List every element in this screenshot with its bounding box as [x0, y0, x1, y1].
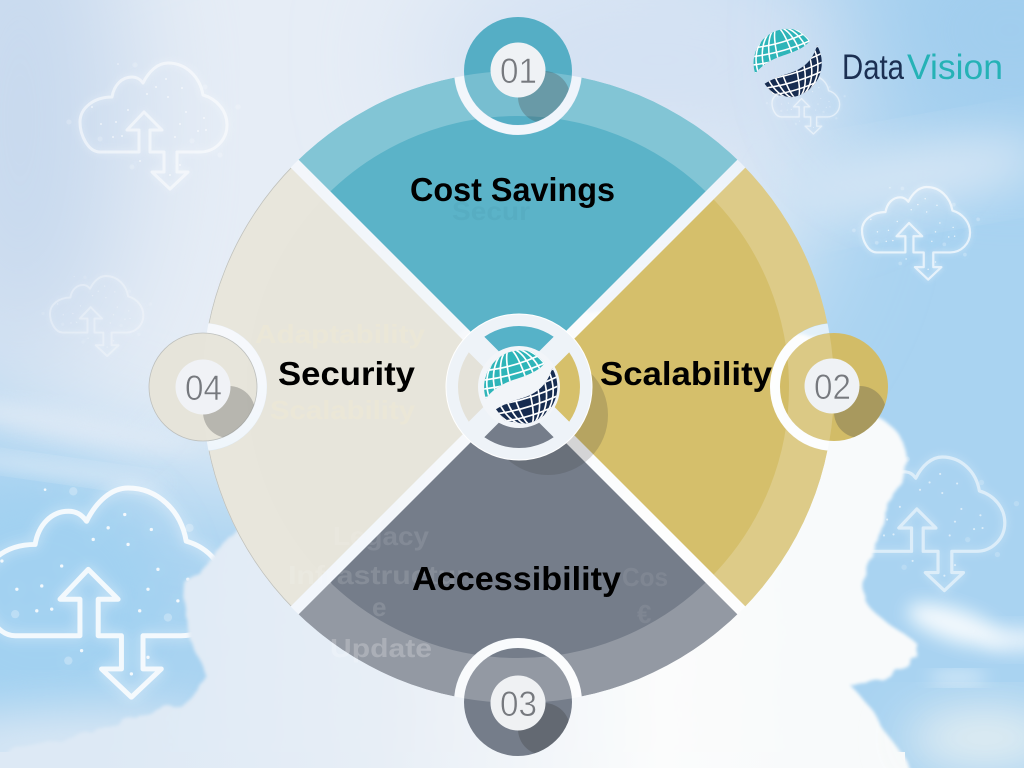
- logo wordmark: Vision: [907, 48, 1003, 87]
- background icon: cloud right: [835, 456, 1019, 591]
- background icon: large cloud bottom left: [0, 487, 248, 697]
- rings around number badges: [207, 76, 830, 698]
- faint ghost text: Infrastructur: [288, 560, 468, 590]
- hub drop shadow: [488, 355, 608, 475]
- center hub: [446, 314, 592, 460]
- background icon: cloud mid left: [41, 276, 152, 356]
- badge: 04: 04: [185, 369, 222, 408]
- faint ghost text: [255, 196, 668, 663]
- background icon: cloud top left: [66, 62, 240, 189]
- icon: logo globe: [740, 17, 834, 109]
- icon: globe in hub: [470, 338, 570, 436]
- faint ghost text: Scalability: [270, 395, 416, 425]
- badge: 01: 01: [500, 52, 537, 91]
- faint ghost text: €: [637, 599, 651, 629]
- pale gaps between sectors: [291, 160, 745, 614]
- faint ghost text: e: [372, 592, 386, 622]
- sector: scalability (right): [574, 168, 828, 606]
- badge: 01: [464, 17, 572, 125]
- white cumulus cloud: [0, 300, 1024, 768]
- faint ghost text: Cos: [622, 562, 668, 592]
- logo: DataVision: [740, 17, 1003, 109]
- logo wordmark: Data: [842, 48, 904, 87]
- badge: 04: [148, 332, 258, 442]
- badge: 03: [464, 648, 572, 756]
- heading: Security: Security: [278, 355, 416, 392]
- sector: accessibility (bottom): [298, 442, 738, 696]
- faint ghost text: Secur: [452, 196, 530, 226]
- sector: cost savings (top): [298, 78, 738, 332]
- faint ghost text: Update: [330, 633, 432, 663]
- faint ghost text: Adaptability: [255, 319, 426, 349]
- heading: Accessibility: Accessibility: [412, 560, 622, 597]
- heading: Scalability: Scalability: [600, 355, 773, 392]
- badge: 02: 02: [814, 368, 851, 407]
- sector: security (left): [208, 168, 462, 606]
- faint ghost text: Legacy: [333, 521, 430, 551]
- badge: 03: 03: [500, 685, 537, 724]
- badge: 02: [780, 333, 888, 441]
- background icon: cloud behind logo: [766, 76, 846, 134]
- heading: Cost Savings: Cost Savings: [410, 171, 615, 208]
- panel: sector wheel: [208, 78, 828, 696]
- background icon: cloud top right: [852, 187, 980, 280]
